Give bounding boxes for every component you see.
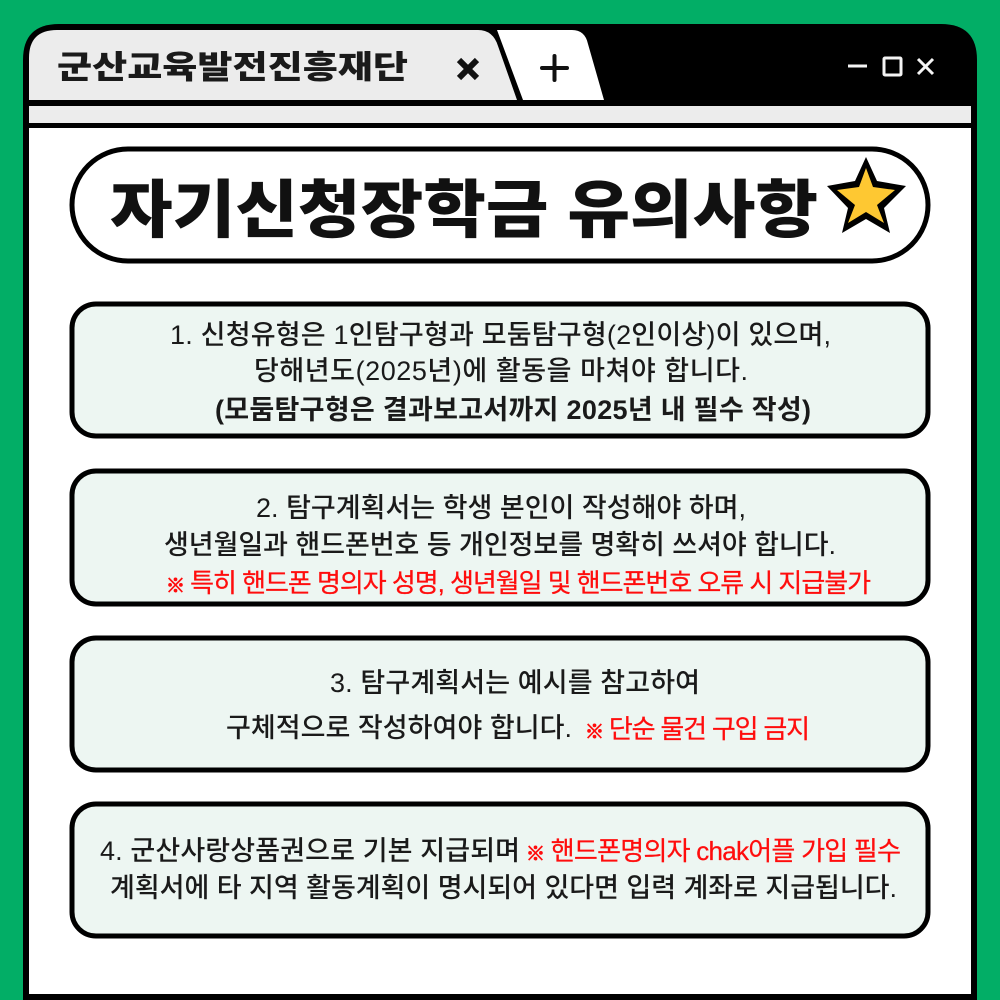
- panel: item 1: 1. 신청유형은 1인탐구형과 모둠탐구형(2인이상)이 있으며,: [170, 320, 831, 350]
- panel: item 4: ※ 핸드폰명의자 chak어플 가입 필수: [526, 836, 901, 866]
- title pill: [72, 149, 928, 261]
- panel: item 3: 3. 탐구계획서는 예시를 참고하여: [330, 668, 700, 698]
- window controls: [848, 58, 933, 75]
- tab: foundation name: [29, 30, 517, 100]
- title pill: 자기신청장학금 유의사항: [110, 176, 818, 246]
- panel: item 2: ※ 특히 핸드폰 명의자 성명, 생년월일 및 핸드폰번호 오류 시 지급불가: [166, 568, 871, 598]
- panel: item 2: 2. 탐구계획서는 학생 본인이 작성해야 하며,: [256, 493, 746, 523]
- panel: item 4: 계획서에 타 지역 활동계획이 명시되어 있다면 입력 계좌로 지급됩니다.: [110, 873, 897, 903]
- icon: star: [827, 157, 906, 233]
- panel: item 3: 구체적으로 작성하여야 합니다.: [226, 713, 572, 743]
- panel: item 1: 당해년도(2025년)에 활동을 마쳐야 합니다.: [254, 356, 748, 386]
- panel: item 3: ※ 단순 물건 구입 금지: [585, 714, 810, 744]
- panel: item 2: 생년월일과 핸드폰번호 등 개인정보를 명확히 쓰셔야 합니다.: [164, 530, 836, 560]
- panel: item 4: 4. 군산사랑상품권으로 기본 지급되며: [100, 836, 520, 866]
- tab: new tab plus: [497, 30, 604, 100]
- panel: item 2: [72, 471, 928, 604]
- panel: item 4: [72, 804, 928, 936]
- panel: item 3: [72, 638, 928, 770]
- panel: item 1: [72, 304, 928, 436]
- panel: item 1: (모둠탐구형은 결과보고서까지 2025년 내 필수 작성): [215, 395, 811, 425]
- tab: foundation name: 군산교육발전진흥재단: [57, 49, 408, 85]
